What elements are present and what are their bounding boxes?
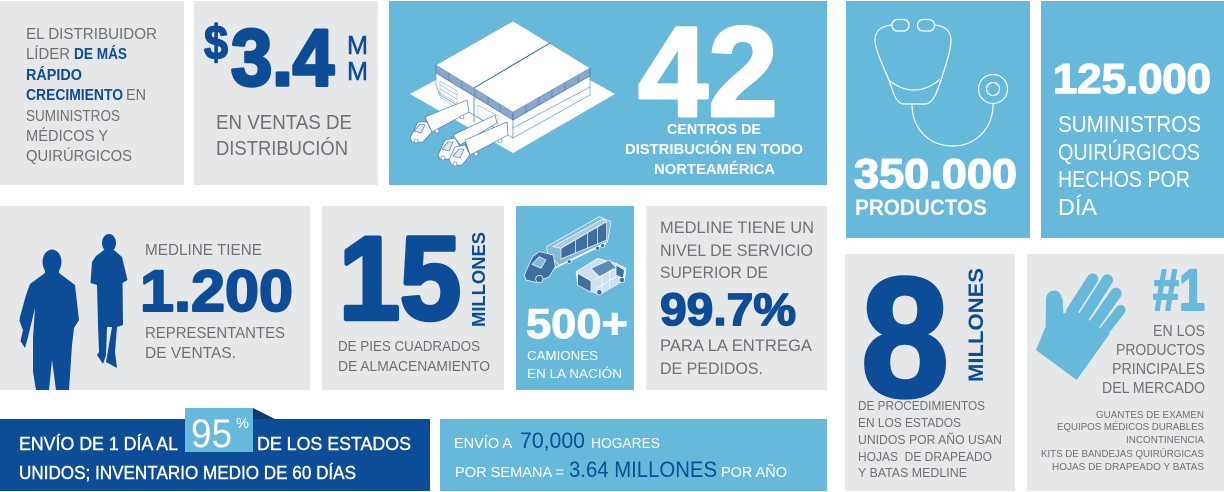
- panel: procedures: UNIDOS POR AÑO USAN: [858, 432, 1002, 447]
- icon: semi truck and van: [524, 217, 626, 295]
- panel: sales: EN VENTAS DE: [216, 112, 352, 134]
- panel: products: 350.000: [854, 150, 1017, 197]
- panel: procedures: [845, 243, 1015, 491]
- panel: one-day shipping banner: UNIDOS; INVENTARIO MEDIO DE 60 DÍAS: [19, 462, 356, 483]
- panel: service level: DE PEDIDOS.: [660, 359, 763, 378]
- panel: procedures: Y BATAS MEDLINE: [858, 465, 967, 480]
- panel: surgical supplies per day: 125.000: [1053, 55, 1211, 102]
- panel: sales representatives: MEDLINE TIENE: [145, 242, 262, 259]
- panel: fastest growing distributor: EL DISTRIBUIDOR: [26, 26, 157, 43]
- truck 2: [438, 115, 497, 160]
- panel: fastest growing distributor: DE MÁS: [74, 44, 127, 63]
- panel: fastest growing distributor: CRECIMIENTO: [26, 87, 123, 104]
- panel: sales: [194, 1, 378, 185]
- panel: number one market products: EQUIPOS MÉDICOS DURABLES: [1057, 420, 1204, 433]
- panel: one-day shipping banner: ENVÍO DE 1 DÍA AL: [19, 433, 178, 454]
- panel: trucks: CAMIONES: [527, 348, 598, 363]
- panel: service level: [646, 206, 827, 390]
- panel: procedures: DE PROCEDIMIENTOS: [858, 398, 985, 413]
- panel: service level: SUPERIOR DE: [660, 263, 768, 282]
- panel: number one market products: EN LOS: [1153, 323, 1205, 340]
- panel: sales: DISTRIBUCIÓN: [216, 137, 348, 160]
- panel: sales representatives: [0, 206, 310, 390]
- panel: sales representatives: 1.200: [140, 259, 293, 324]
- panel: service level: MEDLINE TIENE UN: [660, 218, 814, 237]
- panel: homes shipped: 3.64 MILLONES: [569, 457, 717, 482]
- icon: woman silhouette: [90, 234, 128, 368]
- panel: warehouse square feet: DE PIES CUADRADOS: [338, 339, 480, 355]
- panel: sales: M: [347, 56, 368, 86]
- panel: number one market products: KITS DE BANDEJAS QUIRÚRGICAS: [1041, 447, 1204, 460]
- callout: 95 percent tab: 95: [191, 412, 232, 456]
- loading doors: [440, 81, 498, 130]
- panel: sales: M: [347, 30, 368, 60]
- panel: surgical supplies per day: QUIRÚRGICOS: [1058, 139, 1200, 165]
- panel: procedures: MILLONES: [965, 268, 988, 382]
- panel: fastest growing distributor: SUMINISTROS: [26, 108, 120, 125]
- callout: 95 percent tab: %: [236, 415, 249, 432]
- panel: number one market products: PRODUCTOS: [1116, 342, 1205, 359]
- panel: fastest growing distributor: LÍDER: [26, 44, 70, 63]
- panel: fastest growing distributor: RÁPIDO: [26, 65, 82, 84]
- panel: warehouse square feet: 15: [339, 213, 461, 345]
- panel: number one market products: [1027, 254, 1224, 491]
- panel: products: [846, 1, 1030, 238]
- panel: warehouse square feet: [322, 206, 504, 390]
- panel: number one market products: #1: [1153, 258, 1205, 323]
- panel: homes shipped: HOGARES: [591, 435, 660, 452]
- panel: sales representatives: REPRESENTANTES: [145, 325, 285, 342]
- panel: homes shipped: POR SEMANA =: [455, 464, 564, 481]
- panel: surgical supplies per day: HECHOS POR: [1058, 166, 1190, 192]
- panel: number one market products: GUANTES DE EXAMEN: [1096, 409, 1204, 421]
- panel: service level: NIVEL DE SERVICIO: [660, 241, 813, 260]
- panel: procedures: EN LOS ESTADOS: [858, 415, 961, 430]
- panel: distribution centers: DISTRIBUCIÓN EN TODO: [625, 140, 803, 158]
- panel: distribution centers: NORTEAMÉRICA: [654, 161, 776, 178]
- panel: homes shipped: ENVÍO A: [454, 435, 512, 452]
- panel: trucks: [516, 206, 634, 390]
- panel: number one market products: DEL MERCADO: [1102, 380, 1205, 397]
- truck 3: [449, 122, 508, 166]
- panel: procedures: HOJAS DE DRAPEADO: [858, 449, 992, 464]
- panel: sales: $: [204, 17, 228, 70]
- panel: distribution centers: [389, 1, 827, 185]
- panel: products: PRODUCTOS: [855, 195, 987, 220]
- panel: sales representatives: DE VENTAS.: [145, 345, 236, 362]
- panel: fastest growing distributor: MÉDICOS Y: [26, 126, 108, 145]
- panel: surgical supplies per day: [1041, 1, 1224, 238]
- panel: service level: 99.7%: [660, 284, 796, 335]
- panel: homes shipped: 70,000: [520, 428, 585, 453]
- panel: number one market products: INCONTINENCIA: [1126, 434, 1204, 446]
- panel: fastest growing distributor: [0, 1, 184, 185]
- panel: homes shipped: [440, 419, 827, 491]
- panel: trucks: EN LA NACIÓN: [527, 366, 622, 381]
- panel: surgical supplies per day: DÍA: [1058, 194, 1098, 220]
- panel: surgical supplies per day: SUMINISTROS: [1058, 111, 1201, 137]
- icon: stethoscope: [875, 20, 1008, 146]
- panel: number one market products: PRINCIPALES: [1112, 361, 1205, 378]
- panel: procedures: 8: [861, 243, 949, 433]
- panel: distribution centers: CENTROS DE: [667, 122, 761, 138]
- icon: man silhouette: [20, 250, 79, 390]
- panel: distribution centers: 42: [638, 1, 778, 144]
- panel: service level: PARA LA ENTREGA: [660, 336, 813, 355]
- panel: sales: 3.4: [231, 13, 334, 102]
- callout: 95 percent tab: [185, 408, 275, 456]
- panel: fastest growing distributor: QUIRÚRGICOS: [26, 146, 132, 165]
- panel: fastest growing distributor: EN: [126, 87, 146, 104]
- icon: warehouse with trucks: [410, 21, 615, 166]
- panel: number one market products: HOJAS DE DRAPEADO Y BATAS: [1052, 461, 1204, 473]
- panel: warehouse square feet: DE ALMACENAMIENTO: [338, 359, 490, 375]
- panel: trucks: 500+: [526, 300, 628, 347]
- icon: glove: [1036, 279, 1121, 380]
- panel: one-day shipping banner: DE LOS ESTADOS: [257, 433, 411, 454]
- truck 1: [410, 100, 469, 143]
- panel: homes shipped: POR AÑO: [721, 464, 787, 481]
- panel: one-day shipping banner: [0, 408, 430, 491]
- panel: warehouse square feet: MILLONES: [469, 232, 489, 327]
